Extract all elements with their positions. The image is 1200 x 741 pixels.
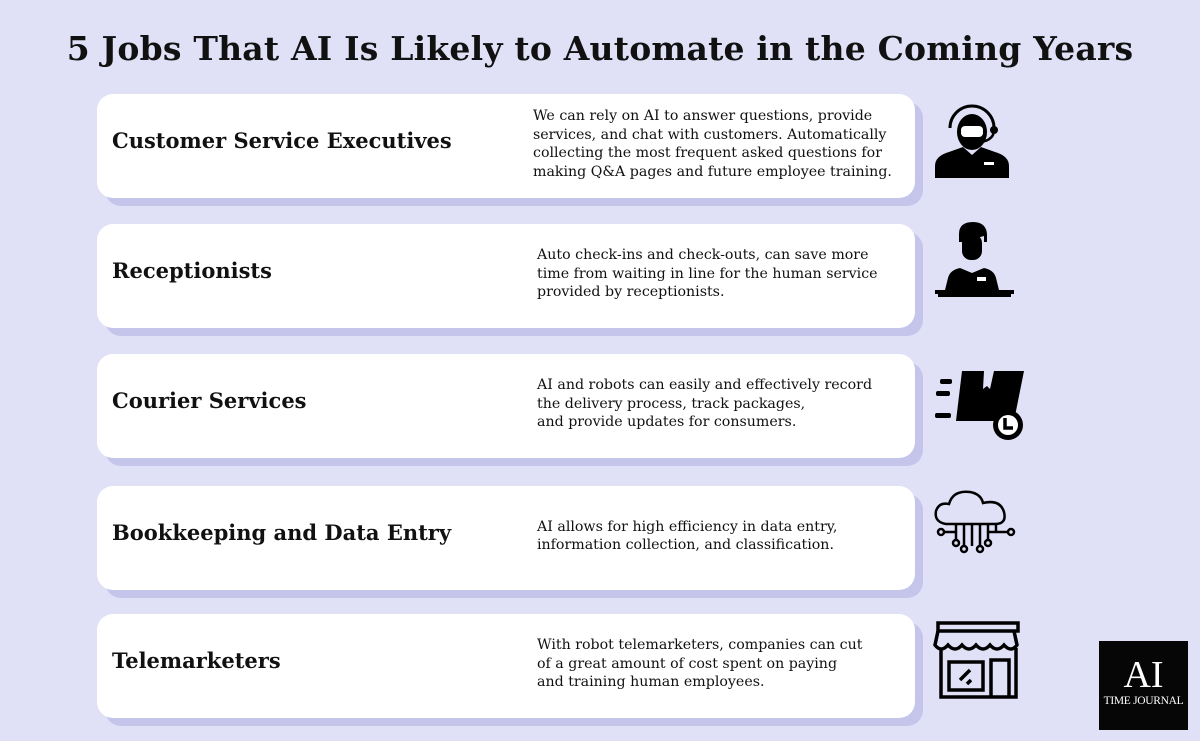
text: With robot telemarketers, companies can cut <box>537 637 862 653</box>
heading: Customer Service Executives <box>112 128 452 152</box>
icon: receptionist <box>935 222 1014 297</box>
text: AI and robots can easily and effectively record <box>537 377 872 393</box>
panel: bookkeeping <box>97 486 915 590</box>
text: making Q&A pages and future employee training. <box>533 164 892 180</box>
text: provided by receptionists. <box>537 284 724 300</box>
logo: TIME JOURNAL <box>1104 695 1183 707</box>
text: services, and chat with customers. Automatically <box>533 126 886 142</box>
text: collecting the most frequent asked questions for <box>533 145 882 161</box>
title: 5 Jobs That AI Is Likely to Automate in the Coming Years <box>67 29 1133 68</box>
panel: telemarketers <box>97 614 915 718</box>
logo <box>1099 641 1188 730</box>
text: information collection, and classification. <box>537 537 834 553</box>
panel: courier <box>97 354 915 458</box>
icon: cloud network <box>934 490 1016 554</box>
panel: receptionists <box>97 224 915 328</box>
heading: Bookkeeping and Data Entry <box>112 520 451 544</box>
heading: Receptionists <box>112 258 272 282</box>
text <box>533 108 892 180</box>
icon: headset agent <box>935 104 1009 178</box>
text: time from waiting in line for the human service <box>537 266 878 282</box>
heading: Courier Services <box>112 388 307 412</box>
heading: Telemarketers <box>112 648 281 672</box>
panel: customer service <box>97 94 915 198</box>
text: We can rely on AI to answer questions, provide <box>533 108 872 124</box>
text: the delivery process, track packages, <box>537 396 805 412</box>
logo: AI <box>1123 654 1164 696</box>
icon: storefront <box>933 621 1020 699</box>
text <box>536 518 837 553</box>
text: and training human employees. <box>537 674 765 690</box>
text: AI allows for high efficiency in data entry, <box>537 518 837 534</box>
text: and provide updates for consumers. <box>537 414 796 430</box>
icon: delivery box <box>935 371 1024 440</box>
text: Auto check-ins and check-outs, can save more <box>537 247 868 263</box>
text <box>536 247 878 300</box>
text: of a great amount of cost spent on paying <box>537 656 837 672</box>
text <box>537 637 862 690</box>
text <box>536 377 872 430</box>
